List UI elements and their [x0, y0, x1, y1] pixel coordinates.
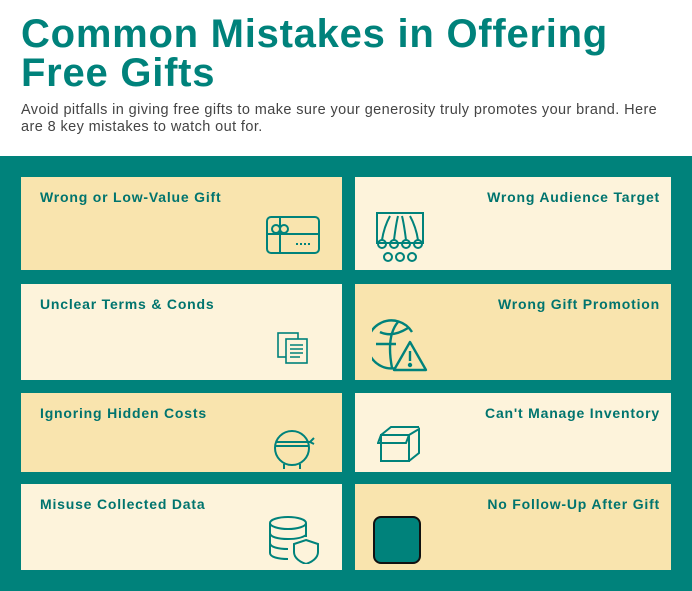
subtitle: are 8 key mistakes to watch out for.: [21, 119, 263, 135]
card: ignoring hidden costs: [21, 393, 342, 472]
title: Common Mistakes in Offering: [21, 12, 608, 56]
title: [21, 12, 608, 95]
card: wrong audience target: Wrong Audience Target: [487, 189, 660, 205]
icon: open box: [377, 426, 420, 462]
card: unclear terms: Unclear Terms & Conds: [40, 296, 214, 312]
card: no follow-up: No Follow-Up After Gift: [487, 496, 660, 512]
card: ignoring hidden costs: Ignoring Hidden Costs: [40, 405, 207, 421]
subtitle: Avoid pitfalls in giving free gifts to make sure your generosity truly promotes your brand. Here: [21, 102, 657, 118]
card: misuse collected data: [21, 484, 342, 570]
icon: database shield: [269, 516, 319, 564]
subtitle: [21, 102, 657, 135]
card: wrong gift promotion: [355, 284, 671, 380]
card: wrong audience target: [355, 177, 671, 270]
card: wrong or low-value gift: Wrong or Low-Value Gift: [40, 189, 221, 205]
card: wrong or low-value gift: [21, 177, 342, 270]
card: no follow-up: [355, 484, 671, 570]
icon: globe warning: [372, 319, 428, 372]
card: misuse collected data: Misuse Collected Data: [40, 496, 205, 512]
panel: mistakes grid: [0, 156, 692, 591]
icon: gift card: [266, 216, 320, 254]
card: can't manage inventory: Can't Manage Inventory: [485, 405, 660, 421]
title: Free Gifts: [21, 51, 215, 95]
icon: curtain audience: [376, 212, 424, 262]
icon: teal square: [373, 516, 421, 564]
card: wrong gift promotion: Wrong Gift Promotion: [498, 296, 660, 312]
card: can't manage inventory: [355, 393, 671, 472]
icon: blindfolded head: [274, 430, 315, 469]
card: unclear terms: [21, 284, 342, 380]
icon: documents: [277, 332, 308, 364]
